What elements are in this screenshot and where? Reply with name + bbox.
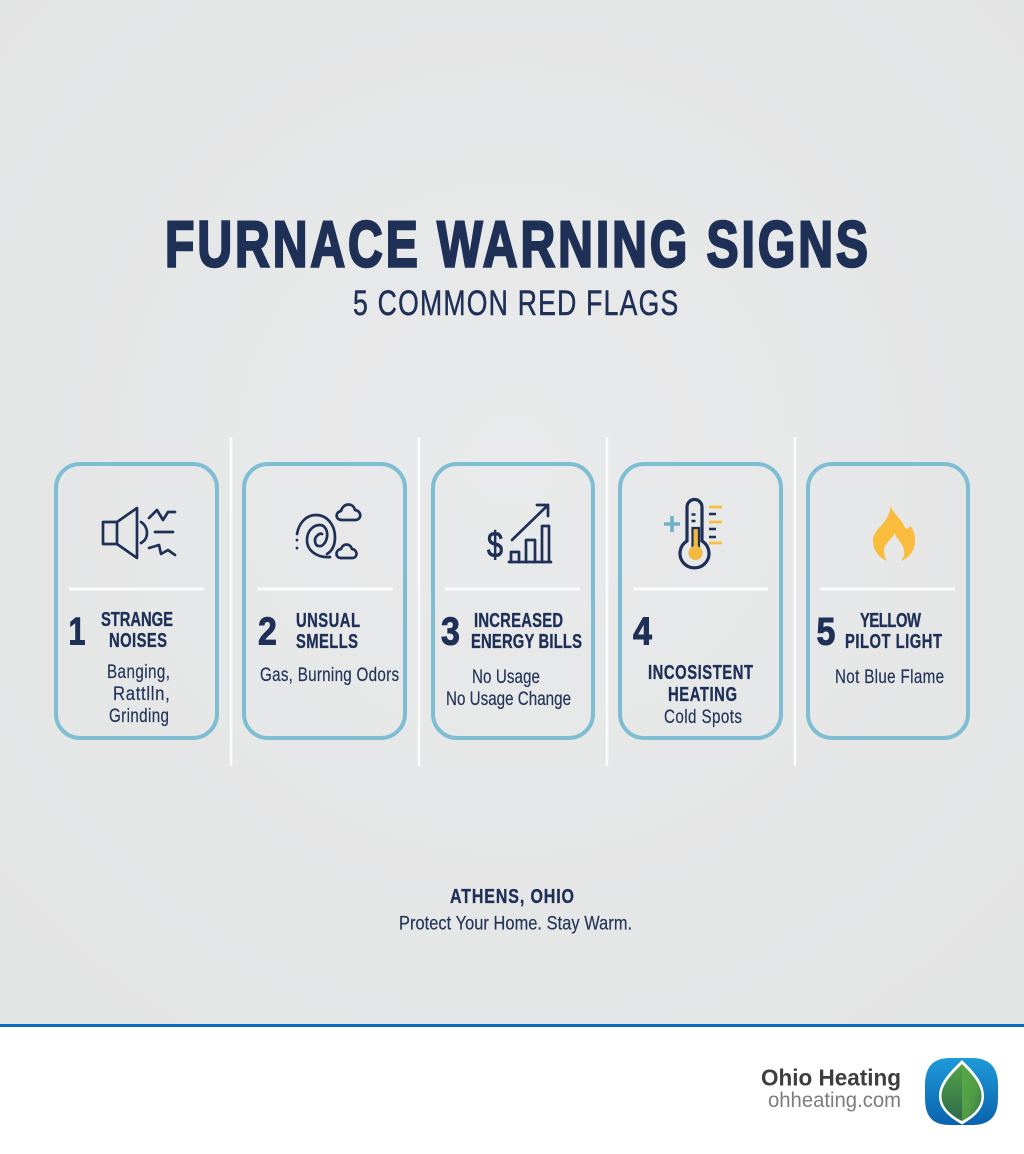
tagline: Protect Your Home. Stay Warm.: [399, 912, 632, 934]
description: cold spots: Cold Spots: [664, 705, 742, 727]
number 2: 2: [258, 609, 277, 653]
title: FURNACE WARNING SIGNS: [165, 209, 868, 281]
icon: swirl and clouds: [297, 504, 360, 558]
description: bills: No Usage: [472, 665, 540, 687]
heading: increased energy bills: ENERGY BILLS: [471, 630, 582, 653]
panel: inconsistent heating: [620, 464, 781, 738]
heading: yellow pilot light: [845, 609, 942, 653]
footer website: ohheating.com: [768, 1089, 901, 1112]
number 4: 4: [633, 609, 652, 653]
panel: strange noises: [56, 464, 217, 738]
heading: strange noises: [101, 608, 173, 652]
heading: inconsistent heating: HEATING: [668, 683, 737, 706]
heading: unusual smells: [296, 609, 360, 653]
icon: dollar and rising bars: [487, 505, 551, 565]
number 5: 5: [816, 609, 835, 653]
description: noises: Grinding: [109, 704, 169, 726]
panel: unusual smells: [244, 464, 405, 738]
description: bills: No Usage Change: [446, 687, 571, 709]
panel: increased energy bills: [433, 464, 593, 738]
number 3: 3: [441, 609, 460, 653]
panel: yellow pilot light: [808, 464, 968, 738]
heading: unusual smells: SMELLS: [296, 630, 358, 653]
icon: flame: [873, 504, 915, 561]
icon: thermometer: [664, 500, 722, 568]
description: noises: Banging,: [107, 660, 170, 682]
description: flame: Not Blue Flame: [835, 665, 944, 687]
heading: inconsistent heating: INCOSISTENT: [648, 661, 753, 684]
footer brand name: Ohio Heating: [761, 1064, 901, 1090]
subtitle: 5 COMMON RED FLAGS: [353, 283, 678, 323]
number 1: 1: [68, 610, 85, 653]
icon: speaker with noise: [103, 508, 175, 558]
description: bills: [446, 665, 571, 709]
heading: increased energy bills: [471, 609, 582, 653]
location: ATHENS, OHIO: [450, 885, 574, 907]
icon: dollar and rising bars: $: [487, 524, 503, 565]
heading: strange noises: STRANGE: [101, 608, 173, 631]
description: smells: Gas, Burning Odors: [260, 663, 399, 685]
heading: increased energy bills: INCREASED: [474, 609, 563, 632]
heading: yellow pilot light: PILOT LIGHT: [845, 630, 942, 653]
heading: unusual smells: UNSUAL: [296, 609, 360, 632]
description: noises: Rattlln,: [113, 683, 170, 704]
heading: inconsistent heating: [648, 661, 753, 706]
icon: logo leaf: [925, 1058, 998, 1125]
heading: yellow pilot light: YELLOW: [860, 609, 921, 632]
footer band: [0, 1024, 1024, 1154]
heading: strange noises: NOISES: [109, 629, 167, 652]
description: noises: [107, 660, 170, 726]
